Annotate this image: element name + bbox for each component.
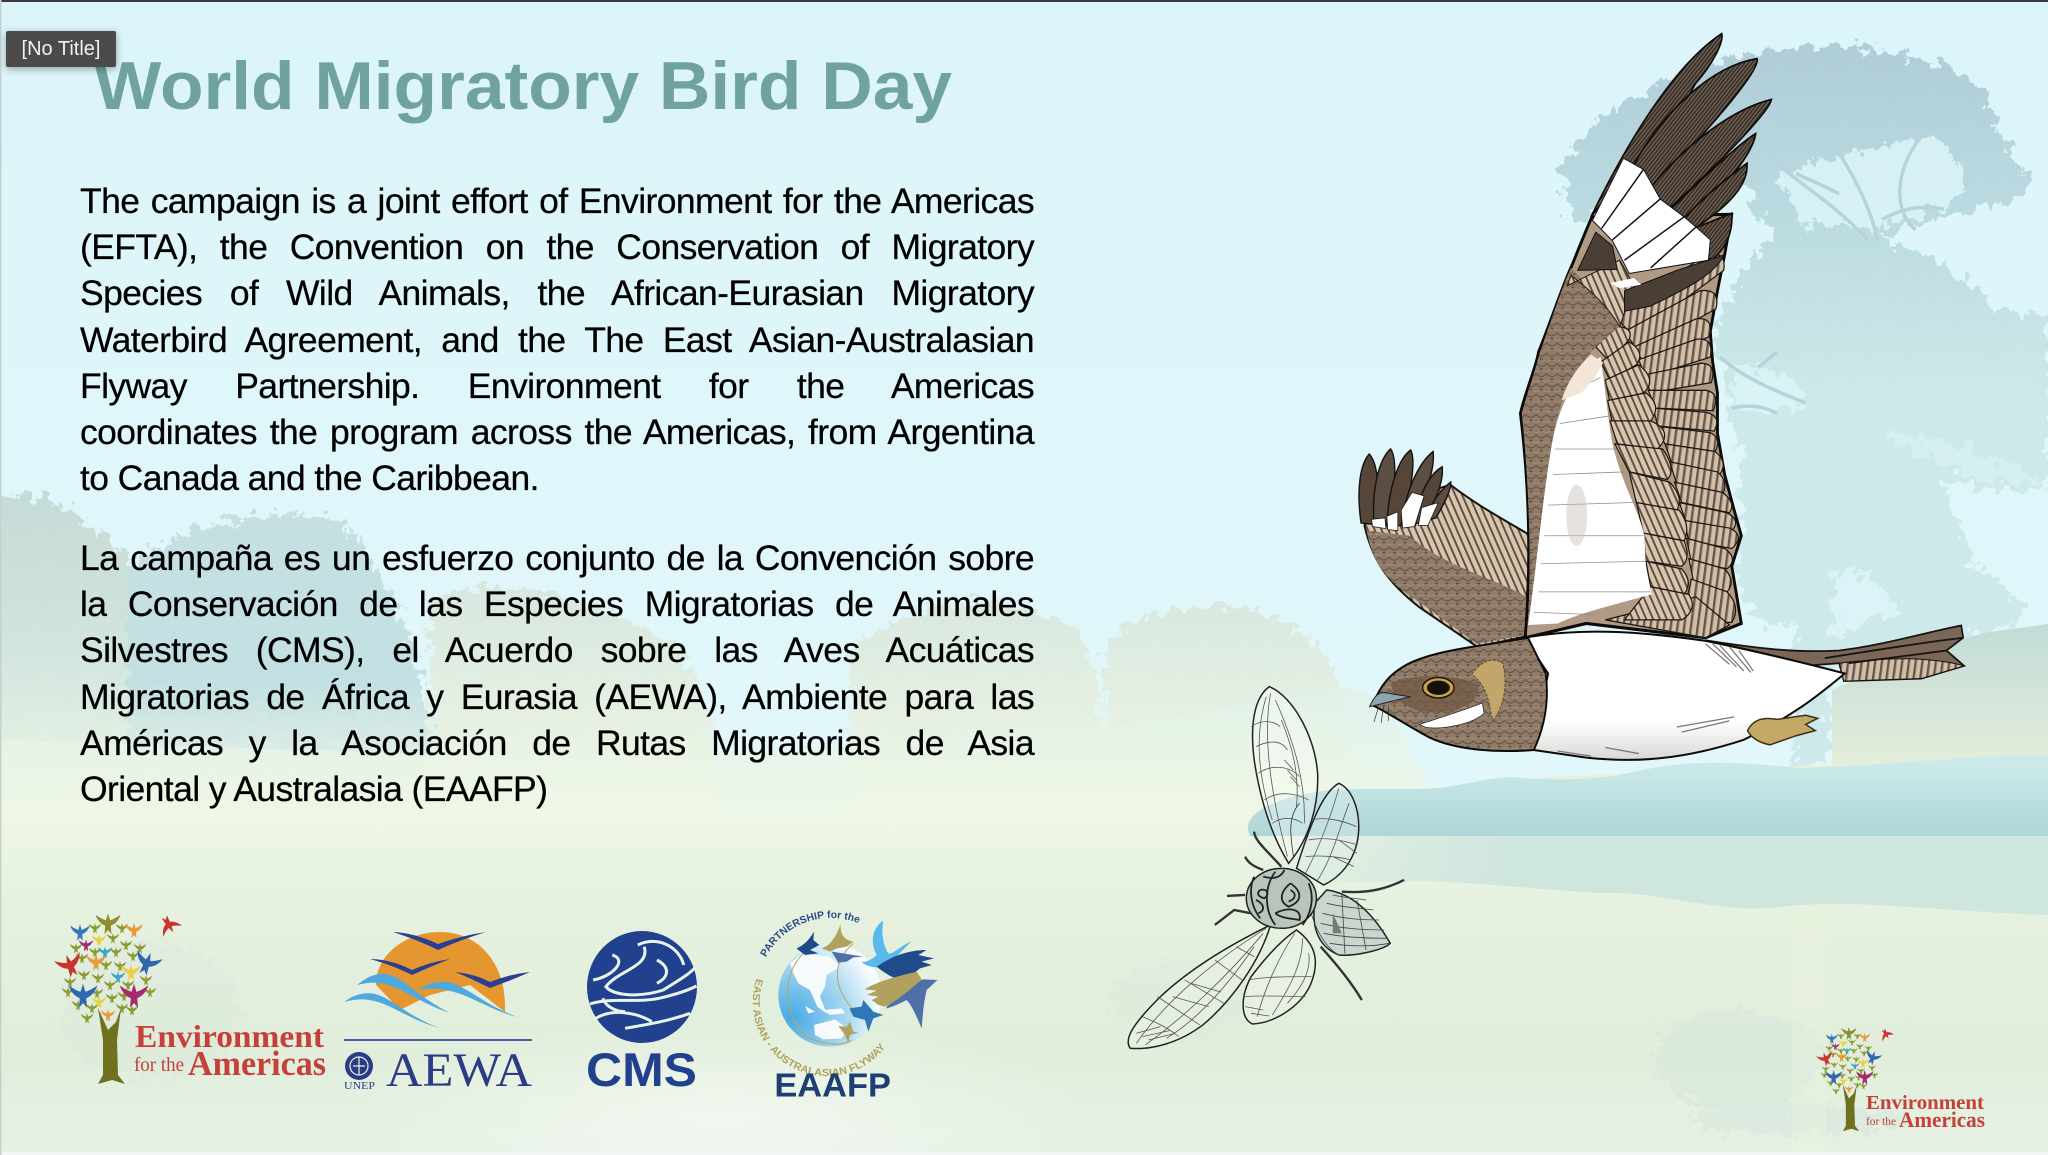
text block: Spanish paragraph — [80, 538, 1035, 809]
far wing — [1359, 449, 1531, 647]
logo: Environment for the Americas: Americas — [188, 1044, 326, 1083]
text block: English paragraph: Species of Wild Animals, the African-Eurasian Migratory — [80, 273, 1034, 313]
far bank — [1420, 765, 2048, 812]
pale land — [0, 687, 1432, 812]
cicada lower wings — [1128, 925, 1315, 1049]
logo: CMS — [586, 931, 697, 1096]
glow and faint reflected trees — [60, 905, 1910, 1155]
text block: English paragraph: coordinates the program across the Americas, from Argentina — [80, 412, 1034, 452]
text block: English paragraph: to Canada and the Caribbean. — [80, 458, 539, 498]
bird illustration — [1359, 34, 1964, 760]
text block: English paragraph: (EFTA), the Convention on the Conservation of Migratory — [80, 227, 1034, 267]
left treeline silhouettes — [0, 495, 1350, 830]
water reflection — [1240, 836, 2048, 915]
big tree silhouette — [1560, 46, 2048, 765]
logo: small Environment for the Americas — [1816, 1026, 1985, 1132]
logo: EAAFP: EAAFP — [774, 1068, 891, 1105]
text block: English paragraph: Flyway Partnership. Environment for the Americas — [80, 366, 1034, 406]
logo: small Environment for the Americas: for the — [1866, 1114, 1896, 1128]
cicada body — [1215, 832, 1404, 1000]
dark wing wedge — [1578, 232, 1724, 311]
text block: English paragraph — [80, 181, 1035, 498]
top edge — [0, 0, 2048, 2]
wing leading edge — [1522, 268, 1620, 622]
foot — [1748, 715, 1818, 745]
white wing patch — [1592, 158, 1710, 273]
logo: AEWA: UNEP — [344, 1080, 375, 1092]
logo: small Environment for the Americas: Americas — [1899, 1107, 1985, 1132]
text block: English paragraph: The campaign is a joint effort of Environment for the Americas — [80, 181, 1034, 221]
wing coverts — [1596, 327, 1692, 620]
throat — [1419, 703, 1484, 728]
cicada abdomen — [1314, 890, 1390, 955]
logo: EAAFP: PARTNERSHIP for the — [760, 910, 860, 957]
lower meadow — [0, 812, 2048, 1155]
text block: Spanish paragraph: Migratorias de África y Eurasia (AEWA), Ambiente para las — [80, 677, 1034, 717]
text block: Spanish paragraph: Silvestres (CMS), el Acuerdo sobre las Aves Acuáticas — [80, 630, 1034, 670]
text block: Spanish paragraph: la Conservación de las Especies Migratorias de Animales — [80, 584, 1034, 624]
beak — [1370, 693, 1411, 707]
logo: AEWA — [344, 932, 532, 1097]
logo: CMS: CMS — [586, 1043, 697, 1096]
eye patch — [1391, 676, 1479, 712]
AEWA waves — [344, 974, 517, 1028]
logo: AEWA: AEWA — [386, 1044, 532, 1097]
eye — [1423, 678, 1454, 698]
logo: Environment for the Americas: Environment — [135, 1018, 324, 1054]
EAAFP ring text — [766, 918, 880, 957]
wing flight feathers — [1605, 254, 1738, 638]
cheek — [1472, 660, 1505, 720]
bird head and neck — [1370, 638, 1547, 751]
tooltip: no title: [No Title] — [22, 38, 100, 60]
cicada legs — [1215, 832, 1404, 1000]
title: World Migratory Bird Day — [94, 48, 952, 124]
dark primary feathers — [1591, 34, 1771, 261]
logo: EAAFP: EAST ASIAN - AUSTRALASIAN FLYWAY — [752, 979, 884, 1076]
text block: English paragraph: Waterbird Agreement, and the The East Asian-Australasian — [80, 320, 1034, 360]
tooltip: no title — [6, 31, 116, 67]
tail — [1706, 626, 1964, 681]
EAAFP birds — [797, 921, 937, 1043]
bird body — [1524, 632, 1845, 760]
text block: Spanish paragraph: Oriental y Australasia (EAAFP) — [80, 769, 547, 809]
logo: Environment for the Americas: for the — [134, 1054, 184, 1076]
water band — [1248, 755, 2048, 836]
text block: Spanish paragraph: Américas y la Asociación de Rutas Migratorias de Asia — [80, 723, 1034, 763]
UNEP emblem — [345, 1052, 373, 1080]
cicada thorax — [1246, 868, 1316, 928]
text block: Spanish paragraph: La campaña es un esfuerzo conjunto de la Convención sobre — [80, 538, 1034, 578]
logo: Environment for the Americas — [54, 911, 326, 1084]
EAAFP globe — [778, 943, 882, 1047]
right-hand hill — [1832, 624, 2048, 770]
white underwing — [1528, 355, 1652, 625]
cicada illustration — [1128, 687, 1404, 1049]
tree emblem — [54, 911, 183, 1084]
logo: small Environment for the Americas: Environment — [1866, 1092, 1984, 1114]
logo: EAAFP — [752, 910, 938, 1105]
near wing base — [1520, 214, 1741, 638]
small tree emblem — [1816, 1026, 1894, 1131]
cicada upper left wing — [1251, 687, 1318, 863]
AEWA birds — [370, 932, 530, 988]
CMS emblem — [587, 931, 697, 1043]
AEWA sun — [376, 932, 505, 1012]
cicada upper right wing — [1291, 783, 1359, 885]
tree branches — [1720, 138, 1944, 413]
